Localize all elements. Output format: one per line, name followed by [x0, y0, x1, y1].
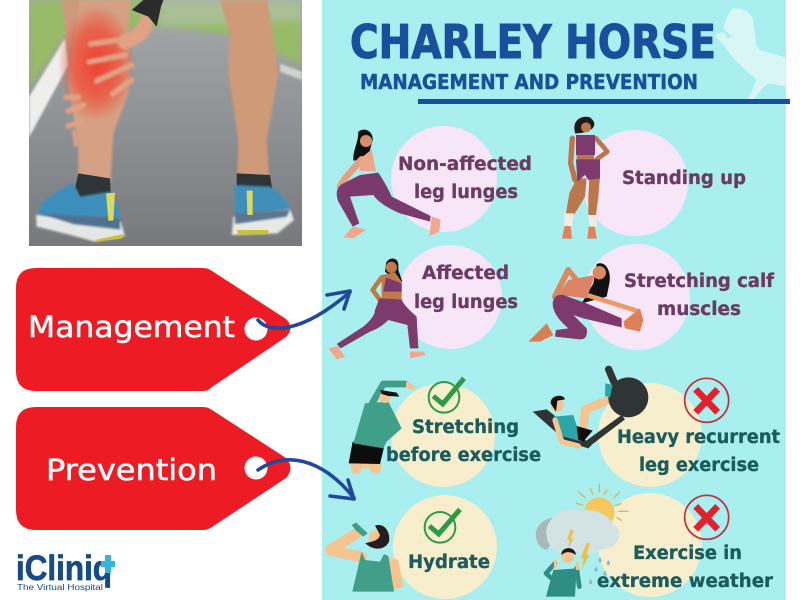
- icon: red cross, heavy exercise: [685, 378, 729, 422]
- figure: woman standing up: [562, 117, 607, 239]
- title: CHARLEY HORSE: [350, 15, 716, 69]
- text: affected leg lunges: leg lunges: [414, 292, 518, 313]
- text: stretching calf muscles: Stretching calf: [624, 271, 775, 292]
- circle: affected leg lunges: [398, 245, 502, 349]
- text: exercise in extreme weather: [597, 543, 774, 592]
- text: stretching calf muscles: [624, 271, 775, 320]
- figure: man drinking from bottle: [330, 522, 403, 592]
- figure: person leg-pressing a kettlebell: [533, 369, 648, 448]
- text: stretching before exercise: before exercise: [386, 445, 541, 466]
- text: exercise in extreme weather: Exercise in: [633, 543, 742, 564]
- circle: non-affected leg lunges: [391, 126, 497, 232]
- text: stretching calf muscles: muscles: [657, 299, 741, 320]
- heading underline: [418, 99, 790, 104]
- figure: woman in lunge, affected leg: [328, 259, 426, 359]
- logo: iCliniq: The Virtual Hospital: [17, 583, 103, 592]
- text: hydrate: Hydrate: [408, 552, 490, 573]
- arrow: management to exercises: [258, 291, 350, 328]
- text: non-affected leg lunges: leg lunges: [414, 182, 518, 203]
- text: non-affected leg lunges: [398, 154, 532, 203]
- circle: exercise in extreme weather: [598, 493, 702, 597]
- icon: green check, stretching: [429, 378, 464, 413]
- tag: prevention: [16, 407, 290, 530]
- figure: man stretching sideways: [349, 382, 416, 473]
- circle: hydrate: [393, 495, 497, 599]
- tag: management: [16, 268, 290, 391]
- figure: woman in lunge, non-affected leg: [337, 130, 441, 238]
- tag: management: Management: [28, 310, 235, 344]
- panel: exercises background: [322, 0, 786, 600]
- circle: stretching calf muscles: [584, 244, 690, 350]
- text: stretching before exercise: Stretching: [412, 417, 519, 438]
- text: heavy recurrent leg exercise: Heavy recurrent: [617, 427, 780, 448]
- photo: runner holding painful calf: [29, 0, 302, 246]
- icon: green check, hydrate: [425, 509, 460, 543]
- text: stretching before exercise: [386, 417, 541, 466]
- circle: heavy recurrent leg exercise: [598, 383, 702, 487]
- circle: standing up: [582, 130, 688, 236]
- icon: rearing horse watermark: [715, 8, 787, 99]
- text: exercise in extreme weather: extreme weather: [597, 571, 774, 592]
- text: non-affected leg lunges: Non-affected: [398, 154, 532, 175]
- arrow: prevention to exercises: [258, 460, 354, 499]
- logo: iCliniq: iCliniq: [16, 549, 112, 588]
- subtitle: MANAGEMENT AND PREVENTION: [360, 70, 698, 94]
- text: affected leg lunges: Affected: [422, 263, 509, 284]
- tag: prevention: Prevention: [46, 453, 217, 487]
- text: heavy recurrent leg exercise: leg exercise: [639, 455, 759, 476]
- text: heavy recurrent leg exercise: [617, 427, 780, 476]
- circle: stretching before exercise: [391, 383, 495, 487]
- icon: red cross, extreme weather: [685, 495, 729, 539]
- figure: man under storm cloud and sun: [536, 483, 628, 597]
- figure: woman stretching calf: [528, 263, 643, 342]
- text: affected leg lunges: [414, 263, 518, 313]
- text: standing up: Standing up: [622, 168, 746, 189]
